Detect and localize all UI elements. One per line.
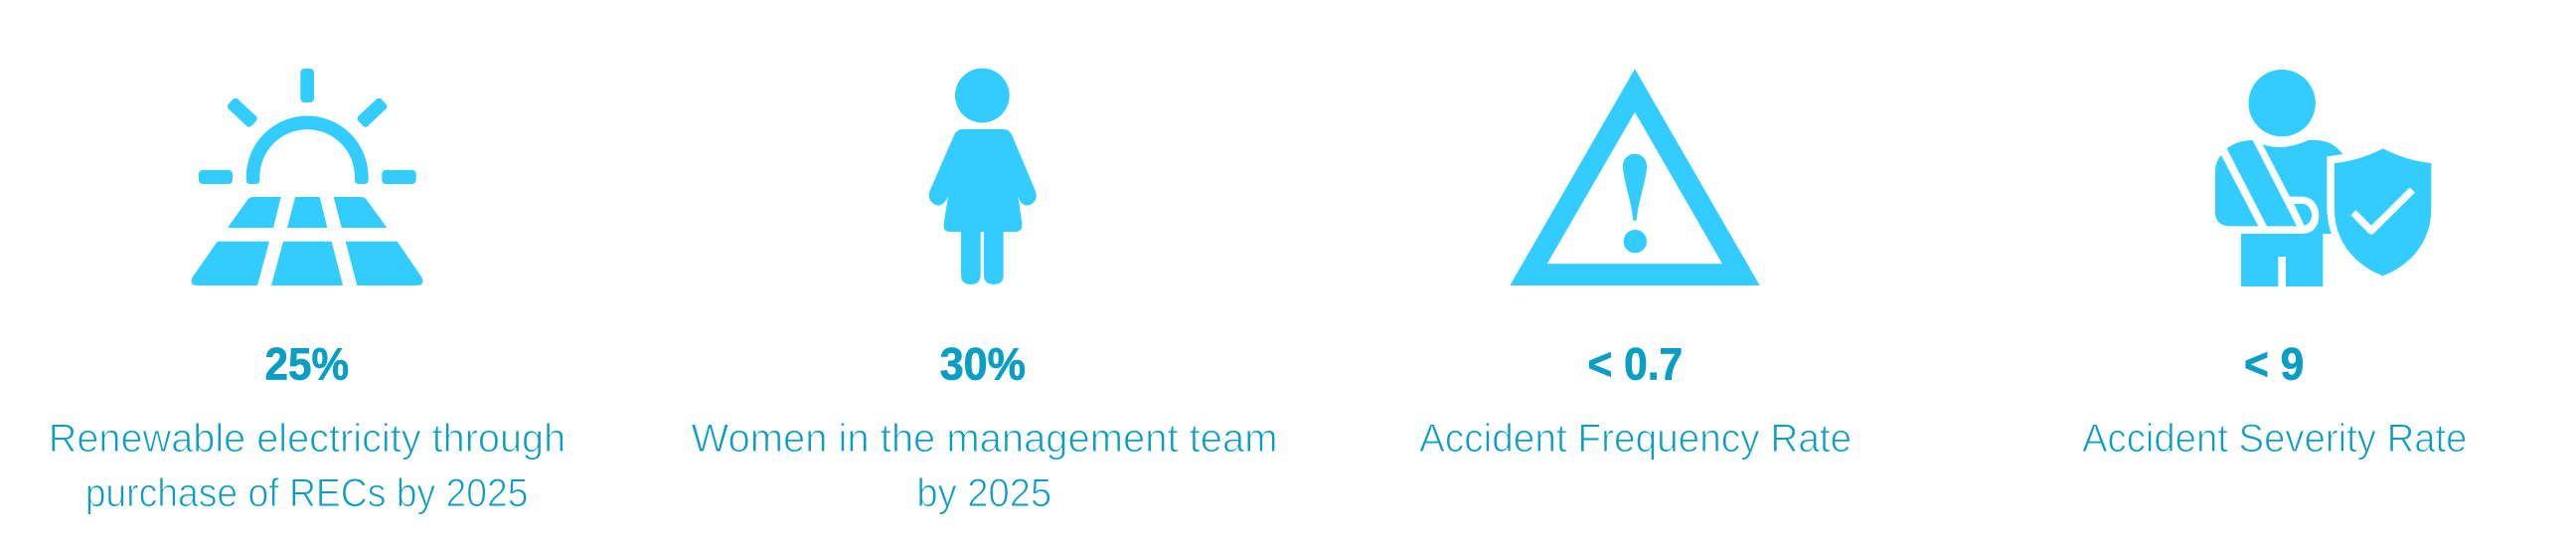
label: renewable electricity: Renewable electricity through: [49, 417, 565, 461]
number: 30%: 30%: [940, 338, 1026, 389]
label: women in the management team: by 2025: [916, 471, 1051, 515]
label: renewable electricity: purchase of RECs by 2025: [85, 471, 528, 515]
label: women in the management team: Women in the management team: [692, 417, 1278, 461]
icon: injured person with shield: [2215, 70, 2431, 286]
panel: renewable electricity: [49, 69, 565, 515]
icon: woman figure: [929, 69, 1037, 284]
label: renewable electricity: [49, 417, 565, 515]
number: < 9: < 9: [2244, 338, 2304, 389]
label: accident frequency rate: Accident Frequency Rate: [1419, 417, 1852, 461]
label: women in the management team: [692, 417, 1278, 515]
icon: sun over solar panel: [192, 69, 422, 285]
panel: accident frequency rate: [1419, 69, 1852, 461]
label: accident severity rate: Accident Severity Rate: [2082, 417, 2467, 461]
panel: accident severity rate: [2082, 70, 2467, 461]
icon: warning triangle: [1510, 69, 1760, 285]
number: 25%: 25%: [264, 338, 349, 389]
panel: women in management: [692, 69, 1278, 515]
number: < 0.7: < 0.7: [1588, 338, 1683, 389]
